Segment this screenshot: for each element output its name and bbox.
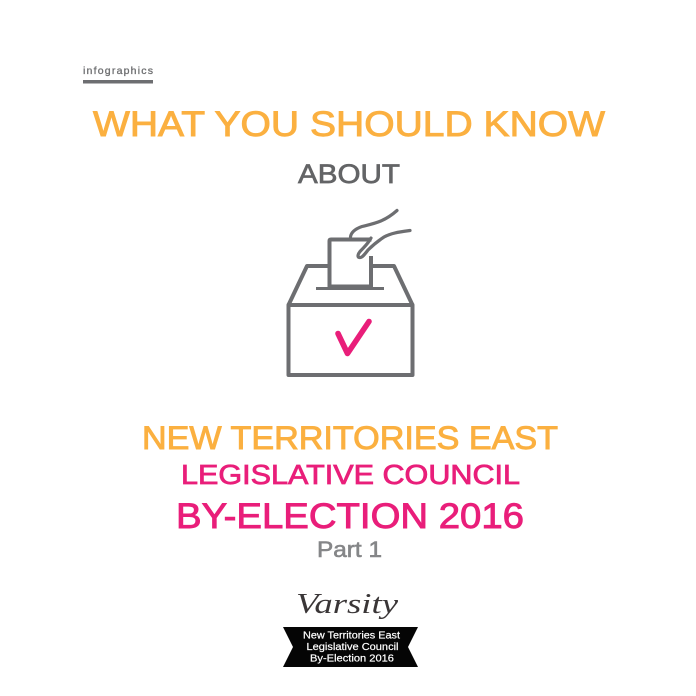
subtitle: about: ABOUT <box>298 159 400 189</box>
logo: varsity: Varsity <box>296 588 398 620</box>
ribbon badge <box>283 627 418 667</box>
section tag: infographics <box>83 65 153 84</box>
heading: new territories east: NEW TERRITORIES EAST <box>142 420 558 456</box>
box lid <box>288 266 412 305</box>
icon: ballot box with hand <box>288 210 412 375</box>
ribbon badge: By-Election 2016 <box>310 654 394 664</box>
ballot slot <box>316 287 384 290</box>
label: part 1: Part 1 <box>317 537 382 562</box>
icon: pink check mark <box>338 322 369 354</box>
heading: legislative council: LEGISLATIVE COUNCIL <box>181 459 520 490</box>
heading: by-election 2016: BY-ELECTION 2016 <box>176 497 524 536</box>
hand <box>350 210 410 258</box>
ribbon badge: New Territories East <box>303 630 400 642</box>
title: what you should know: WHAT YOU SHOULD KNOW <box>93 105 605 144</box>
section tag: infographics: infographics <box>83 65 153 77</box>
ballot paper <box>330 240 372 286</box>
ribbon badge: Legislative Council <box>306 642 398 653</box>
box body <box>288 305 412 375</box>
